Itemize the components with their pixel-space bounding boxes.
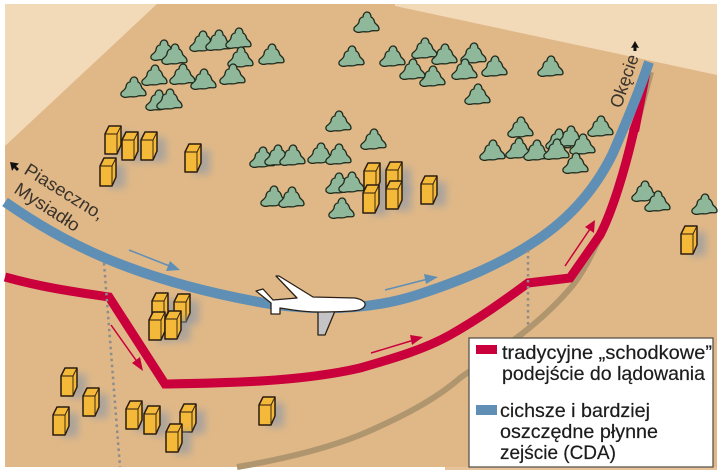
small red arrow down — [111, 325, 143, 371]
buildings — [53, 126, 706, 454]
lower wing — [318, 311, 335, 335]
red route: traditional stepped approach — [5, 70, 651, 384]
small blue arrow right — [385, 274, 438, 290]
label: Piaseczno, Mysiadło: Mysiadło — [11, 179, 84, 236]
legend — [469, 338, 713, 467]
arrow: to Okęcie — [631, 41, 639, 51]
legend text: traditional approach: tradycyjne „schodkowe” — [502, 342, 712, 364]
arrow: to Piaseczno — [10, 162, 19, 171]
legend text: continuous descent — [500, 400, 658, 464]
small red arrow up — [565, 220, 595, 266]
airplane body — [256, 276, 365, 314]
label: Okęcie: Okęcie — [606, 52, 643, 110]
light area top right — [395, 4, 717, 75]
small blue arrow left — [129, 250, 180, 271]
legend text: continuous descent: oszczędne płynne — [500, 421, 658, 443]
red route taper — [629, 70, 651, 132]
legend text: traditional approach — [502, 342, 712, 385]
legend text: continuous descent: zejście (CDA) — [500, 442, 616, 464]
legend swatch: blue — [476, 405, 497, 415]
ground edge shadow curve — [237, 72, 651, 467]
light area top left — [5, 4, 157, 146]
blue route: continuous descent — [5, 62, 649, 308]
trees — [121, 12, 717, 218]
legend text: continuous descent: cichsze i bardziej — [500, 400, 650, 422]
legend text: traditional approach: podejście do lądowania — [502, 363, 705, 385]
small red arrow middle — [371, 335, 423, 353]
legend swatch: red — [476, 345, 497, 354]
label: Piaseczno, Mysiadło: Piaseczno, — [21, 159, 108, 224]
airplane — [256, 276, 365, 335]
dotted lines — [104, 250, 528, 467]
map bottom strip — [445, 467, 717, 470]
